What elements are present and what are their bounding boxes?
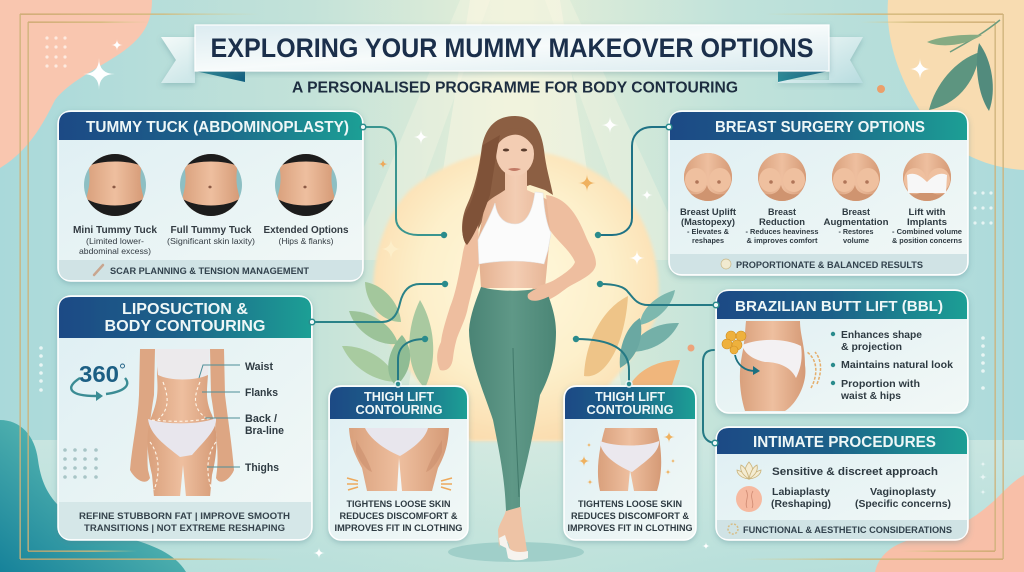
option: breast reduction: Reduction	[759, 217, 805, 228]
benefit text: IMPROVES FIT IN CLOTHING	[334, 523, 462, 534]
connector node: thigh lift left	[395, 381, 401, 387]
text: labiaplasty: Labiaplasty	[772, 486, 830, 498]
benefit text: TIGHTENS LOOSE SKIN	[578, 499, 682, 510]
option: lift with implants: Lift with	[908, 207, 946, 218]
bullet: proportion: Proportion with	[841, 378, 920, 390]
bullet: proportion	[831, 378, 920, 402]
panel: brazilian butt lift	[716, 290, 968, 413]
bullet: maintains natural look: Maintains natural look	[841, 359, 953, 371]
footer: benefits: TRANSITIONS | NOT EXTREME RESHAPING	[84, 523, 285, 534]
label: back / bra-line: Bra-line	[245, 425, 284, 437]
connector lines	[312, 127, 716, 443]
option: breast uplift: - Elevates &	[687, 227, 730, 236]
ribbon main bar	[195, 25, 829, 71]
option: breast augmentation: Augmentation	[824, 217, 889, 228]
header: CONTOURING	[356, 403, 442, 417]
face	[496, 132, 534, 176]
option: lift with implants: Implants	[907, 217, 947, 228]
text: labiaplasty	[771, 486, 831, 510]
sports bra	[478, 192, 551, 264]
option: mini tummy tuck: abdominal excess)	[79, 246, 151, 256]
label: back / bra-line: Back /	[245, 413, 277, 425]
benefit text: REDUCES DISCOMFORT &	[340, 511, 458, 522]
option: full tummy tuck: (Significant skin laxity)	[167, 236, 255, 246]
panel: breast surgery options	[669, 111, 968, 275]
dot grid	[63, 448, 98, 479]
option: full tummy tuck	[167, 224, 255, 246]
bullet: enhances shape	[831, 329, 922, 353]
option: breast uplift: (Mastopexy)	[681, 217, 735, 228]
option: mini tummy tuck: (Limited lower-	[86, 236, 144, 246]
neck and torso	[478, 170, 553, 288]
dot grid: right side	[973, 191, 993, 225]
option: lift with implants: & position concerns	[892, 236, 962, 245]
benefit text: REDUCES DISCOMFORT &	[571, 511, 689, 522]
ribbon left tail	[161, 37, 245, 83]
icon: tightening arrows left	[347, 478, 358, 490]
text: vaginoplasty	[855, 486, 951, 510]
dots column: left side	[39, 346, 43, 392]
feet	[498, 507, 527, 552]
central woman figure	[437, 116, 596, 562]
photo: uplift	[684, 153, 732, 201]
bullet: proportion: waist & hips	[840, 390, 901, 402]
header: BREAST SURGERY OPTIONS	[715, 119, 925, 136]
hair back	[462, 116, 553, 246]
header: INTIMATE PROCEDURES	[753, 434, 936, 451]
option: lift with implants: - Combined volume	[892, 227, 962, 236]
panel: liposuction and body contouring	[58, 296, 312, 540]
footer: considerations: FUNCTIONAL & AESTHETIC CONSIDERATIONS	[743, 525, 952, 535]
footer: proportionate results: PROPORTIONATE & BALANCED RESULTS	[736, 260, 923, 271]
icon: fat cells	[722, 331, 746, 354]
bullet: enhances shape: Enhances shape	[841, 329, 922, 341]
option: breast augmentation: Breast	[842, 207, 871, 218]
hand on hip	[528, 284, 558, 301]
option: lift with implants	[892, 207, 962, 245]
decorative blob: bottom-right peach	[875, 475, 1024, 572]
decorative blob: bottom-left teal	[0, 420, 186, 572]
label: thighs	[207, 462, 279, 474]
benefit text	[568, 499, 692, 534]
decorative blob: top-left peach	[0, 0, 152, 168]
shoes	[499, 535, 528, 560]
text: labiaplasty: (Reshaping)	[771, 498, 831, 510]
footer: benefits: REFINE STUBBORN FAT | IMPROVE SMOOTH	[79, 511, 290, 522]
icon: 360 degrees	[71, 361, 127, 401]
photo: extended options	[275, 152, 337, 221]
leaves: top right branch	[927, 20, 1000, 111]
ground shadow	[448, 542, 584, 562]
bullet: enhances shape: & projection	[841, 341, 902, 353]
hair front lock	[462, 135, 500, 245]
panel: intimate procedures	[716, 427, 968, 540]
header: BRAZILIAN BUTT LIFT (BBL)	[735, 298, 943, 315]
icon: peach circle	[736, 486, 762, 512]
option: extended options	[264, 224, 349, 246]
face details	[497, 128, 534, 171]
option: breast reduction: & improves comfort	[746, 236, 818, 245]
text: sensitive approach: Sensitive & discreet approach	[772, 466, 938, 478]
icon: tightening arrows right	[441, 478, 452, 490]
photo: buttocks	[740, 321, 805, 411]
footer: scar planning	[59, 260, 362, 280]
photo: hips	[598, 428, 661, 491]
header	[670, 112, 967, 140]
header: LIPOSUCTION &	[122, 301, 248, 318]
option: breast reduction: - Reduces heaviness	[746, 227, 818, 236]
photo: full tummy tuck	[180, 152, 242, 221]
option: mini tummy tuck: Mini Tummy Tuck	[73, 224, 157, 236]
option: breast augmentation: - Restores	[838, 227, 874, 236]
header	[717, 291, 967, 319]
dot grid: top-left	[45, 36, 67, 68]
sparkles	[578, 431, 676, 485]
footer: scar planning: SCAR PLANNING & TENSION MANAGEMENT	[110, 266, 309, 277]
panel: thigh lift left	[329, 386, 468, 540]
option: breast augmentation	[824, 207, 889, 245]
option: breast reduction	[746, 207, 818, 245]
icon: 360 degrees: 360	[79, 361, 119, 387]
panel: tummy tuck	[58, 111, 363, 281]
footer: benefits	[59, 502, 311, 539]
leaves: centre-left plant	[342, 282, 433, 388]
header	[330, 387, 467, 419]
header: THIGH LIFT	[595, 390, 665, 404]
ribbon right tail	[778, 37, 863, 83]
header	[717, 428, 967, 454]
label: waist	[199, 361, 273, 378]
benefit text: IMPROVES FIT IN CLOTHING	[568, 523, 692, 534]
icon: lotus	[737, 462, 761, 479]
footer: proportionate results	[670, 254, 967, 274]
option: breast uplift: Breast Uplift	[680, 207, 737, 218]
panel: thigh lift right	[564, 386, 696, 540]
option: breast uplift: reshapes	[692, 236, 724, 245]
header	[59, 297, 311, 338]
label: waist: Waist	[245, 361, 273, 373]
label: thighs: Thighs	[245, 462, 279, 474]
header	[59, 112, 362, 140]
header	[565, 387, 695, 419]
title banner	[161, 25, 863, 83]
header: CONTOURING	[586, 403, 674, 417]
subtitle: A PERSONALISED PROGRAMME FOR BODY CONTOURING	[292, 80, 738, 96]
option: breast augmentation: volume	[843, 236, 869, 245]
label: flanks	[202, 387, 278, 399]
text: vaginoplasty: (Specific concerns)	[855, 498, 951, 510]
right arm	[528, 195, 596, 302]
photo: thighs with hands	[349, 428, 449, 491]
option: breast reduction: Breast	[768, 207, 797, 218]
left arm	[437, 222, 480, 370]
label: back / bra-line	[205, 413, 284, 437]
icon: lift arrows	[807, 352, 821, 388]
label: flanks: Flanks	[245, 387, 278, 399]
title: EXPLORING YOUR MUMMY MAKEOVER OPTIONS	[210, 33, 814, 63]
connector nodes on panels	[309, 124, 719, 446]
leggings	[469, 287, 556, 511]
option: extended options: Extended Options	[264, 224, 349, 236]
photo: augmentation	[832, 153, 880, 201]
header: TUMMY TUCK (ABDOMINOPLASTY)	[86, 119, 349, 136]
header: BODY CONTOURING	[104, 318, 266, 335]
footer: considerations	[717, 520, 967, 539]
sparkles	[83, 39, 931, 559]
icon: transfer arrow	[735, 355, 760, 375]
decorative blob: top-right peach	[888, 0, 1024, 170]
leg divider	[513, 348, 519, 497]
option: full tummy tuck: Full Tummy Tuck	[170, 224, 252, 236]
photo: mini tummy tuck	[84, 152, 146, 221]
benefit text	[334, 499, 462, 534]
connector node: thigh lift right	[626, 381, 632, 387]
photo: body with contour marks	[130, 349, 234, 497]
option: extended options: (Hips & flanks)	[278, 236, 334, 246]
header: THIGH LIFT	[364, 390, 434, 404]
option: breast uplift	[680, 207, 737, 245]
photo: lift with implants	[903, 153, 951, 201]
dots column: right side	[979, 336, 987, 495]
benefit text: TIGHTENS LOOSE SKIN	[346, 499, 451, 510]
leaves: centre-right plant	[584, 290, 680, 385]
option: mini tummy tuck	[73, 224, 157, 256]
text: vaginoplasty: Vaginoplasty	[870, 486, 936, 498]
photo: reduction	[758, 153, 806, 201]
